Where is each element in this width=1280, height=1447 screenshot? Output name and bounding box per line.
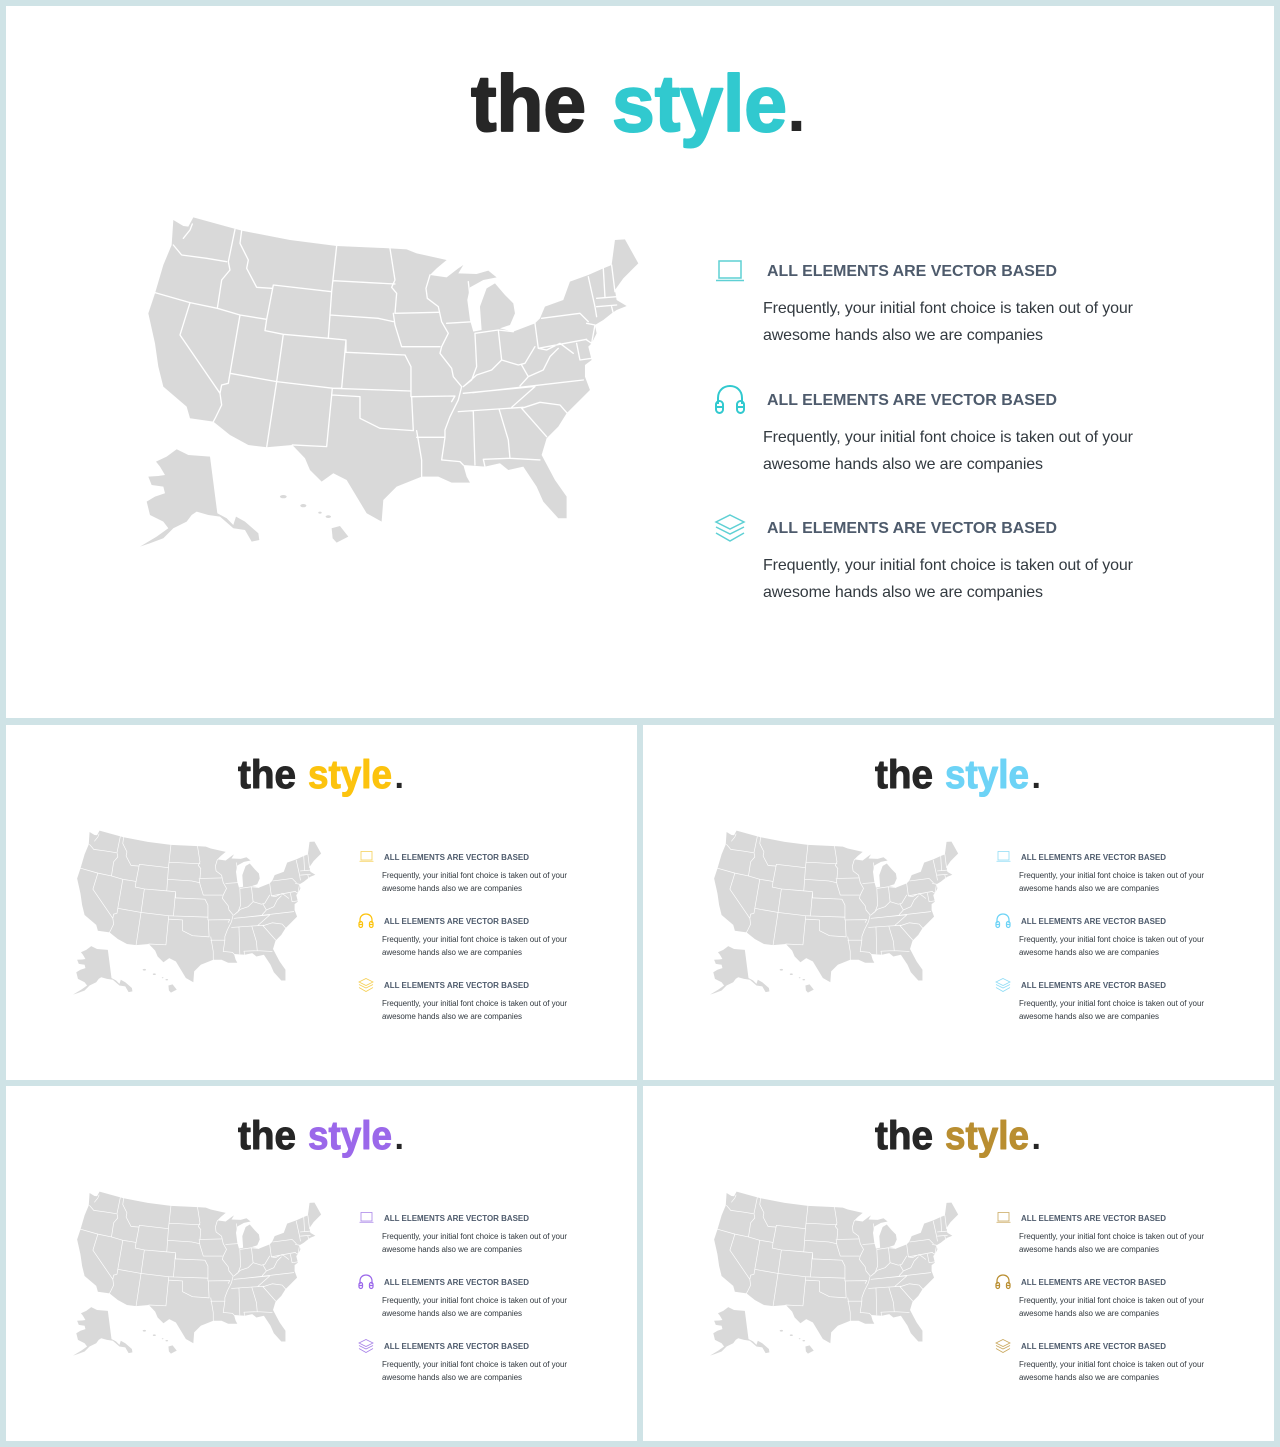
heading: item 1: ALL ELEMENTS ARE VECTOR BASED	[384, 1214, 529, 1223]
icon: laptop	[996, 1212, 1010, 1222]
title: the style purple	[238, 1114, 404, 1158]
icon: headphones	[996, 1275, 1010, 1288]
text: item 2: awesome hands also we are companies	[1019, 1309, 1159, 1318]
text: item 3	[382, 999, 567, 1021]
icon: laptop	[360, 1212, 374, 1222]
heading: item 3: ALL ELEMENTS ARE VECTOR BASED	[384, 981, 529, 990]
text: item 2: Frequently, your initial font choice is taken out of your	[382, 935, 567, 944]
text: item 3: Frequently, your initial font choice is taken out of your	[1019, 999, 1204, 1008]
text: item 1	[1019, 1232, 1204, 1254]
title: the style purple: the	[238, 1114, 296, 1158]
text: item 2: Frequently, your initial font choice is taken out of your	[1019, 935, 1204, 944]
icon: headphones	[359, 1275, 373, 1288]
heading: item 2: ALL ELEMENTS ARE VECTOR BASED	[384, 917, 529, 926]
text: item 1: awesome hands also we are companies	[1019, 1245, 1159, 1254]
title: the style purple: .	[394, 1119, 404, 1157]
heading: item 1: ALL ELEMENTS ARE VECTOR BASED	[1021, 1214, 1166, 1223]
text: item 2	[382, 935, 567, 957]
panel: yellow slide	[6, 725, 637, 1080]
text: item 3: Frequently, your initial font choice is taken out of your	[382, 999, 567, 1008]
text: item 1: awesome hands also we are companies	[382, 1245, 522, 1254]
icon: layers	[716, 515, 744, 541]
heading: item 1: ALL ELEMENTS ARE VECTOR BASED	[384, 853, 529, 862]
panel: gold slide	[643, 1086, 1274, 1441]
heading: item 2: ALL ELEMENTS ARE VECTOR BASED	[384, 1278, 529, 1287]
text: item 1: Frequently, your initial font choice is taken out of your	[382, 871, 567, 880]
map: United States	[73, 1192, 321, 1356]
text: item 2: awesome hands also we are companies	[382, 948, 522, 957]
icon: headphones	[359, 914, 373, 928]
title: the style purple: style	[308, 1114, 392, 1158]
panel: blue slide	[643, 725, 1274, 1080]
icon: laptop	[716, 261, 744, 280]
title: the style: .	[787, 70, 806, 146]
text: item 1: Frequently, your initial font choice is taken out of your	[1019, 871, 1204, 880]
title: the style yellow: style	[308, 753, 392, 797]
text: item 1: awesome hands also we are companies	[1019, 884, 1159, 893]
text: item 2: awesome hands also we are companies	[1019, 948, 1159, 957]
title: the style yellow: .	[394, 758, 404, 796]
text: item 1: Frequently, your initial font choice is taken out of your	[763, 300, 1134, 317]
title: the style blue	[875, 753, 1041, 797]
text: item 3: awesome hands also we are companies	[1019, 1012, 1159, 1021]
heading: item 1: ALL ELEMENTS ARE VECTOR BASED	[767, 263, 1057, 280]
icon: layers	[359, 1340, 373, 1352]
icon: headphones	[996, 914, 1010, 928]
heading: item 3: ALL ELEMENTS ARE VECTOR BASED	[384, 1342, 529, 1351]
heading: item 3: ALL ELEMENTS ARE VECTOR BASED	[1021, 981, 1166, 990]
text: item 1: Frequently, your initial font choice is taken out of your	[382, 1232, 567, 1241]
text: item 1	[763, 300, 1134, 344]
text: item 1	[382, 1232, 567, 1254]
title: the style	[471, 59, 806, 148]
text: item 3	[1019, 1360, 1204, 1382]
text: item 2: Frequently, your initial font choice is taken out of your	[382, 1296, 567, 1305]
text: item 2	[763, 429, 1134, 473]
text: item 3: awesome hands also we are companies	[382, 1012, 522, 1021]
title: the style blue: style	[945, 753, 1029, 797]
text: item 3: Frequently, your initial font choice is taken out of your	[1019, 1360, 1204, 1369]
text: item 3: Frequently, your initial font choice is taken out of your	[763, 557, 1134, 574]
icon: layers	[996, 1340, 1010, 1352]
text: item 3: awesome hands also we are companies	[1019, 1373, 1159, 1382]
text: item 3: awesome hands also we are companies	[382, 1373, 522, 1382]
title: the style blue: .	[1032, 758, 1041, 796]
text: item 2: awesome hands also we are companies	[382, 1309, 522, 1318]
panel: main teal slide	[6, 6, 1274, 718]
heading: item 2: ALL ELEMENTS ARE VECTOR BASED	[767, 392, 1057, 409]
heading: item 1: ALL ELEMENTS ARE VECTOR BASED	[1021, 853, 1166, 862]
title: the style gold: .	[1032, 1119, 1041, 1157]
title: the style: style	[612, 59, 787, 148]
icon: layers	[359, 978, 373, 992]
text: item 2	[1019, 935, 1204, 957]
title: the style gold: the	[875, 1114, 933, 1158]
text: item 3	[382, 1360, 567, 1382]
text: item 2: Frequently, your initial font choice is taken out of your	[1019, 1296, 1204, 1305]
icon: layers	[996, 978, 1010, 992]
text: item 1: Frequently, your initial font choice is taken out of your	[1019, 1232, 1204, 1241]
title: the style yellow	[238, 753, 404, 797]
text: item 3	[1019, 999, 1204, 1021]
icon: headphones	[716, 386, 744, 413]
panel: purple slide	[6, 1086, 637, 1441]
title: the style: the	[471, 59, 586, 148]
heading: item 2: ALL ELEMENTS ARE VECTOR BASED	[1021, 917, 1166, 926]
text: item 2: Frequently, your initial font choice is taken out of your	[763, 429, 1134, 446]
text: item 1: awesome hands also we are companies	[763, 327, 1043, 344]
text: item 3	[763, 557, 1134, 601]
map: United States	[710, 831, 958, 995]
text: item 2	[1019, 1296, 1204, 1318]
text: item 3: awesome hands also we are companies	[763, 584, 1043, 601]
text: item 1	[1019, 871, 1204, 893]
text: item 1	[382, 871, 567, 893]
title: the style blue: the	[875, 753, 933, 797]
title: the style gold	[875, 1114, 1041, 1158]
heading: item 3: ALL ELEMENTS ARE VECTOR BASED	[767, 520, 1057, 537]
text: item 2: awesome hands also we are companies	[763, 456, 1043, 473]
heading: item 3: ALL ELEMENTS ARE VECTOR BASED	[1021, 1342, 1166, 1351]
map: United States	[140, 217, 638, 547]
icon: laptop	[996, 852, 1010, 861]
map: United States	[73, 831, 321, 995]
icon: laptop	[360, 852, 374, 861]
text: item 3: Frequently, your initial font choice is taken out of your	[382, 1360, 567, 1369]
heading: item 2: ALL ELEMENTS ARE VECTOR BASED	[1021, 1278, 1166, 1287]
text: item 1: awesome hands also we are companies	[382, 884, 522, 893]
title: the style yellow: the	[238, 753, 296, 797]
text: item 2	[382, 1296, 567, 1318]
map: United States	[710, 1192, 958, 1356]
title: the style gold: style	[945, 1114, 1029, 1158]
